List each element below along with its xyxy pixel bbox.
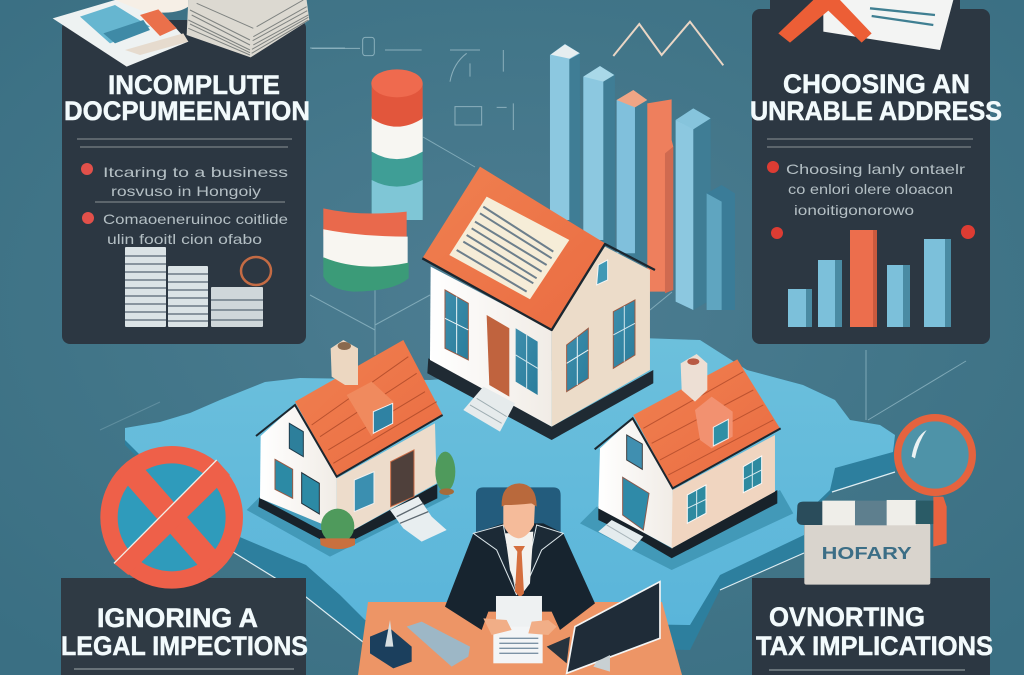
windows and door bbox=[627, 435, 642, 469]
roof bbox=[633, 359, 780, 488]
shirt bbox=[505, 532, 533, 597]
document on desk bbox=[493, 596, 543, 663]
right house bbox=[580, 354, 793, 570]
divider lines bbox=[77, 139, 292, 202]
windows and door bbox=[289, 423, 303, 457]
roof document bbox=[449, 197, 569, 299]
roof bbox=[422, 167, 605, 330]
base bbox=[258, 484, 437, 539]
neighbouring platform bbox=[580, 490, 793, 570]
paper stack illustration bbox=[53, 0, 309, 67]
bullet list: ulin fooitl cion ofabo bbox=[107, 231, 262, 247]
heading: UNRABLE ADDRESS bbox=[750, 96, 1002, 126]
note and orange cross icon bbox=[778, 0, 953, 50]
bullet list bbox=[767, 161, 975, 239]
base bbox=[427, 358, 653, 440]
bar chart bbox=[788, 230, 951, 327]
hands bbox=[483, 618, 557, 635]
monitor bbox=[547, 582, 660, 673]
suit with arms bbox=[445, 523, 595, 630]
shrubs bbox=[321, 509, 354, 543]
icon: hungary shopfront sign bbox=[797, 500, 933, 585]
heading: CHOOSING AN bbox=[783, 69, 970, 99]
heading bbox=[61, 603, 308, 661]
chimney bbox=[331, 340, 358, 385]
bullet list: rosvuso in Hongoiy bbox=[111, 183, 261, 199]
heading bbox=[750, 69, 1002, 126]
lapels bbox=[473, 525, 563, 595]
desk bbox=[358, 602, 682, 675]
center illustration: flags, bars and main house bbox=[312, 22, 735, 440]
panel: incomplete documentation bbox=[53, 0, 310, 344]
roof bbox=[295, 340, 443, 477]
person at desk bbox=[370, 483, 660, 673]
windows and door bbox=[445, 260, 635, 397]
chair bbox=[476, 487, 561, 533]
chimney bbox=[681, 354, 707, 402]
icon: magnifying glass bbox=[898, 418, 972, 547]
divider lines bbox=[767, 139, 973, 147]
steps bbox=[598, 520, 643, 550]
heading: DOCPUMEENATION bbox=[64, 96, 310, 126]
dormer bbox=[695, 397, 733, 448]
cylinder flag bbox=[371, 69, 423, 220]
heading bbox=[756, 602, 993, 661]
steps bbox=[390, 497, 447, 542]
heading: INCOMPLUTE bbox=[108, 70, 280, 100]
hungary map bbox=[125, 338, 895, 650]
tie bbox=[513, 546, 525, 597]
icon: prohibition sign bbox=[108, 454, 235, 581]
base bbox=[598, 490, 777, 558]
line graph zigzag bbox=[613, 22, 723, 65]
heading: IGNORING A bbox=[97, 603, 258, 633]
panel: choosing an unreliable address bbox=[750, 0, 1002, 344]
steps bbox=[463, 387, 515, 432]
heading: LEGAL IMPECTIONS bbox=[61, 631, 308, 661]
small symbols bbox=[312, 37, 513, 130]
panel: overlooking tax implications bbox=[752, 578, 993, 675]
head bbox=[503, 503, 535, 538]
left wall bbox=[430, 267, 552, 427]
bullet list: ionoitigonorowo bbox=[794, 202, 914, 218]
walls bbox=[260, 405, 337, 530]
heading: OVNORTING bbox=[769, 602, 925, 632]
panel: ignoring legal implications bbox=[61, 578, 308, 675]
dormer bbox=[347, 382, 393, 437]
document stacks icon bbox=[125, 247, 271, 327]
bullet list: Itcaring to a business bbox=[103, 164, 288, 180]
bullet list: Choosing lanly ontaelr bbox=[786, 161, 965, 177]
right wall bbox=[552, 247, 650, 427]
heading: TAX IMPLICATIONS bbox=[756, 631, 993, 661]
hungarian flag bbox=[323, 208, 409, 292]
bullet list: co enlori olere oloacon bbox=[788, 181, 953, 197]
desk items bbox=[370, 620, 470, 668]
bullet list bbox=[81, 163, 288, 247]
left house bbox=[247, 340, 455, 557]
main house bbox=[422, 167, 655, 440]
connector lines bbox=[100, 48, 966, 470]
bullet list: Comaoeneruinoc coitlide bbox=[103, 211, 288, 227]
walls bbox=[598, 418, 673, 548]
heading bbox=[64, 70, 310, 126]
tall bars bbox=[550, 44, 735, 310]
icon: hungary shopfront sign: HOFARY bbox=[822, 543, 912, 563]
